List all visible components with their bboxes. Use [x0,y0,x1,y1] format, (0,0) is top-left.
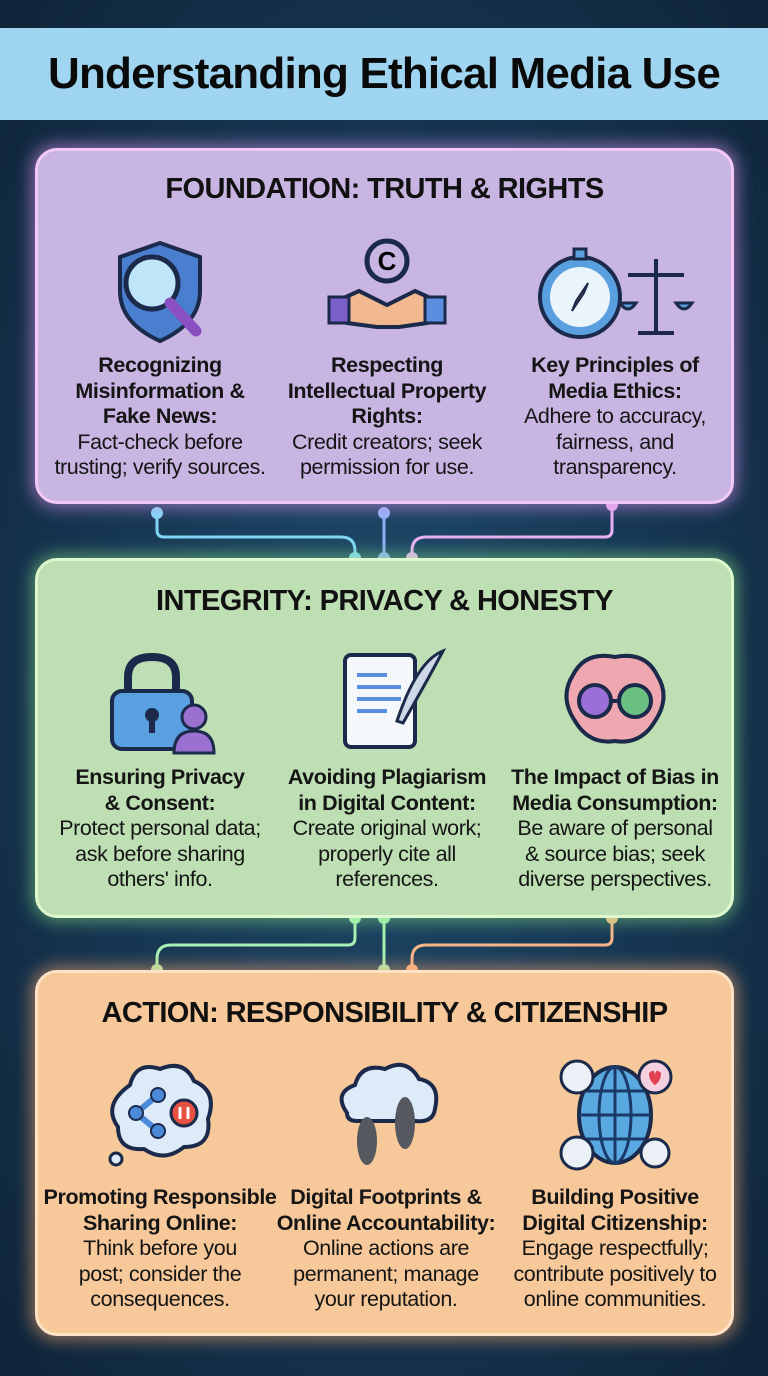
item: footprints: Online Accountability: [277,1210,495,1234]
item: footprints: Online actions are [303,1236,469,1260]
item: plagiarism: in Digital Content: [298,790,476,814]
heading: integrity: INTEGRITY: PRIVACY & HONESTY [156,585,613,617]
item: privacy: Protect personal data; [59,816,261,840]
item: footprints: permanent; manage [293,1262,479,1286]
item: misinformation: Fake News: [103,404,217,428]
item: principles: transparency. [553,455,677,479]
item: plagiarism: Avoiding Plagiarism [288,765,486,789]
item: citizenship: Building Positive [531,1185,699,1209]
item: plagiarism [288,765,486,891]
item: citizenship: contribute positively to [513,1262,717,1286]
panel: foundation [35,148,734,504]
item: privacy: & Consent: [105,790,215,814]
item: principles: Key Principles of [531,353,699,377]
item: misinformation: Recognizing [98,353,222,377]
item: principles: Adhere to accuracy, [524,404,706,428]
item: misinformation: Fact-check before [77,430,243,454]
item: intellectual property: Intellectual Property [288,378,486,402]
title [0,28,768,120]
item: privacy [59,765,261,891]
item: responsible sharing: Sharing Online: [83,1210,237,1234]
item: citizenship [513,1185,717,1311]
item: privacy: others' info. [107,867,213,891]
item: footprints: Digital Footprints & [290,1185,482,1209]
item: bias: Media Consumption: [512,790,718,814]
item: footprints: your reputation. [314,1287,458,1311]
item: principles: fairness, and [556,430,674,454]
item: responsible sharing: Promoting Responsible [44,1185,276,1209]
icon: lock and person [110,653,216,754]
icon: share thought bubble [108,1064,213,1166]
item: bias: Be aware of personal [517,816,713,840]
item: intellectual property: Respecting [331,353,443,377]
item: intellectual property [288,353,486,479]
item: responsible sharing [44,1185,276,1311]
icon: globe with people [560,1060,672,1170]
item: intellectual property: Credit creators; seek [292,430,482,454]
connectors top [151,504,618,558]
connectors bottom [151,918,618,970]
item: bias: diverse perspectives. [518,867,712,891]
item: plagiarism: properly cite all [318,842,456,866]
heading: action: ACTION: RESPONSIBILITY & CITIZENSHIP [102,997,667,1029]
item: principles: Media Ethics: [548,378,682,402]
item: citizenship: Engage respectfully; [522,1236,708,1260]
item: principles [524,353,706,479]
icon: footprints cloud [340,1062,438,1165]
item: footprints [277,1185,495,1311]
item: bias: & source bias; seek [525,842,705,866]
icon: scroll and quill [343,648,446,749]
panel: action [35,970,734,1336]
item: misinformation: trusting; verify sources. [54,455,266,479]
heading: foundation: FOUNDATION: TRUTH & RIGHTS [165,173,604,205]
item: responsible sharing: consequences. [90,1287,230,1311]
item: plagiarism: references. [335,867,439,891]
item: intellectual property: Rights: [351,404,423,428]
item: bias [511,765,719,891]
item: bias: The Impact of Bias in [511,765,719,789]
item: misinformation: Misinformation & [75,378,245,402]
item: citizenship: online communities. [524,1287,706,1311]
item: privacy: Ensuring Privacy [75,765,245,789]
item: citizenship: Digital Citizenship: [522,1210,708,1234]
icon: compass and scales [538,248,695,339]
item: responsible sharing: post; consider the [79,1262,241,1286]
item: plagiarism: Create original work; [293,816,481,840]
icon: brain with glasses [564,654,666,744]
title: Understanding Ethical Media Use [48,49,720,98]
item: intellectual property: permission for use. [300,455,474,479]
item: privacy: ask before sharing [75,842,245,866]
icon: copyright handshake: C [378,246,397,276]
icon: copyright handshake [328,238,446,329]
item: misinformation [54,353,266,479]
item: responsible sharing: Think before you [83,1236,237,1260]
panel: integrity [35,558,734,918]
icon: shield magnifier [118,240,202,344]
